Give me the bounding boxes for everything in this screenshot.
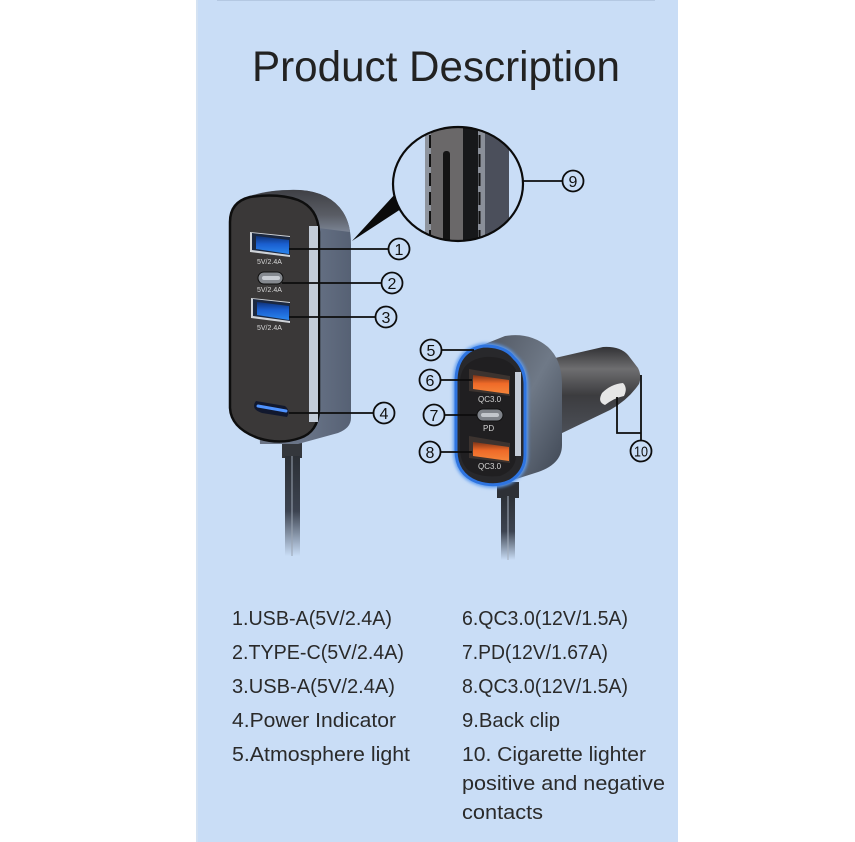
label: port 8: QC3.0: [478, 462, 502, 471]
callout 10: 10: [634, 444, 648, 460]
callout 9: 9: [569, 174, 578, 191]
spec list: left column: 2.TYPE-C(5V/2.4A): [232, 642, 404, 664]
atmosphere light ring: [456, 346, 525, 485]
spec list: right column: 6.QC3.0(12V/1.5A): [462, 608, 628, 630]
callout 8: [420, 442, 472, 462]
callout 7: [424, 404, 477, 426]
callout 7: 7: [430, 408, 439, 425]
spec list: right column: 8.QC3.0(12V/1.5A): [462, 676, 628, 698]
spec list: right column: 9.Back clip: [462, 710, 560, 732]
spec list: left column: 5.Atmosphere light: [232, 744, 410, 766]
callout 9: [523, 170, 584, 192]
power indicator: [254, 401, 289, 417]
infographic: [196, 0, 678, 842]
callout 3: [289, 306, 396, 328]
spec list: right column: positive and negative: [462, 773, 665, 795]
label: port 3: 5V/2.4A: [257, 325, 282, 332]
inner face: [460, 357, 516, 476]
spec list: right column: 7.PD(12V/1.67A): [462, 642, 608, 664]
back clip zoom lens: [352, 126, 524, 242]
USB-A port 3: [251, 298, 290, 323]
spec list: left column: [232, 608, 410, 766]
callout 4: 4: [380, 406, 389, 423]
car charger housing: [480, 335, 562, 481]
label: port 2: 5V/2.4A: [257, 287, 282, 294]
lens interior: [395, 128, 509, 240]
PD port: [477, 409, 503, 421]
callout 6: [420, 370, 472, 390]
plug side contact: [600, 383, 626, 405]
callout 6: 6: [426, 373, 435, 390]
car charger cable: [497, 482, 519, 560]
inner light strip: [515, 372, 521, 456]
spec list: right column: 10. Cigarette lighter: [462, 744, 646, 766]
spec list: left column: 4.Power Indicator: [232, 710, 396, 732]
hub cable: [282, 441, 302, 556]
callout 2: 2: [388, 276, 397, 293]
spec list: right column: [462, 608, 665, 824]
callout 1: [289, 238, 410, 260]
spec list: right column: contacts: [462, 802, 543, 824]
callout 4: [289, 402, 394, 424]
USB-A port 1: [250, 232, 290, 257]
hub light edge strip: [309, 226, 318, 422]
callout 5: 5: [427, 343, 436, 360]
lens outline: [393, 127, 523, 241]
hub side housing: [250, 190, 351, 444]
car charger: [456, 335, 640, 560]
callout 3: 3: [382, 310, 391, 327]
callout 2: [282, 272, 402, 294]
QC3.0 port 6: [469, 369, 510, 396]
label: port 7: PD: [483, 424, 494, 433]
hub front face: [230, 196, 319, 442]
atmosphere light glow: [456, 346, 525, 485]
Type-C port: [258, 272, 283, 284]
title: Product Description: [252, 43, 620, 91]
spec list: left column: 3.USB-A(5V/2.4A): [232, 676, 395, 698]
label: port 1: 5V/2.4A: [257, 259, 282, 266]
callout 1: 1: [395, 242, 404, 259]
callout 8: 8: [426, 445, 435, 462]
panel: background: [196, 0, 678, 842]
callout 5: [420, 340, 474, 360]
hub top housing: [248, 190, 350, 232]
QC3.0 port 8: [469, 436, 510, 463]
lens pointer: [352, 193, 404, 241]
cigarette plug: [555, 347, 640, 435]
multi-port extension hub: [230, 190, 351, 556]
spec list: left column: 1.USB-A(5V/2.4A): [232, 608, 392, 630]
callout 10: [617, 375, 652, 462]
label: port 6: QC3.0: [478, 395, 502, 404]
